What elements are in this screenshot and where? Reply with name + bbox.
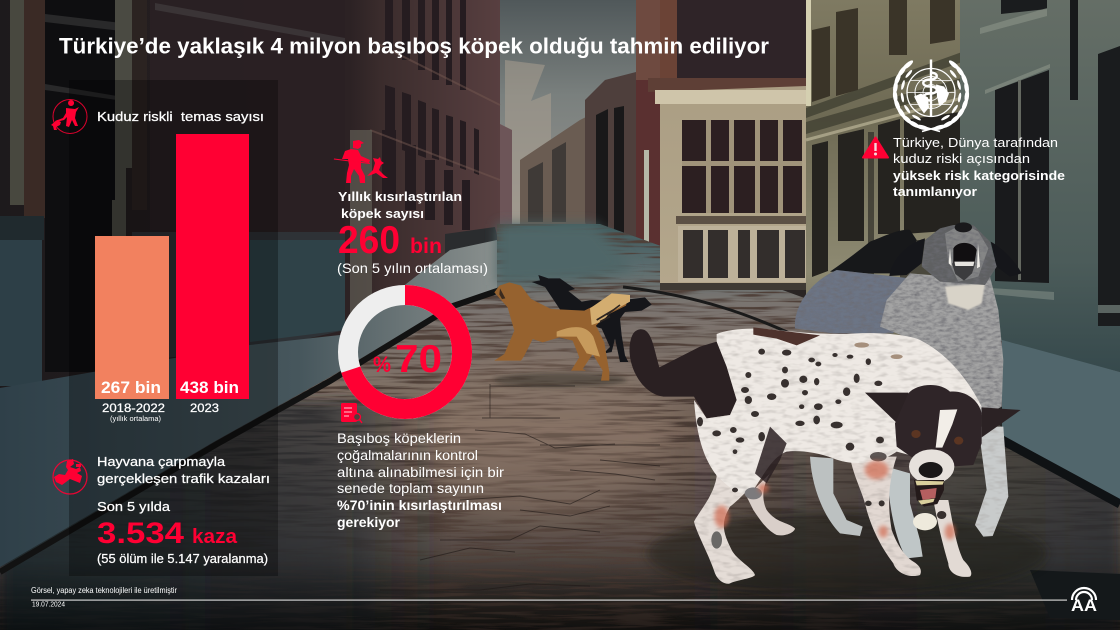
text block: Başıboş köpeklerin (337, 431, 461, 446)
manhole shadow (1030, 570, 1120, 620)
bar: 2018-2022: 2018-2022 (102, 401, 165, 415)
footer note: Görsel, yapay zeka teknolojileri ile üretilmiştir (31, 586, 177, 595)
label: Yıllık kısırlaştırılan (338, 189, 462, 204)
left brick building (0, 0, 500, 390)
panel: neutering statistics (334, 140, 488, 276)
back leg (810, 457, 863, 536)
bar: 2023: 438 bin (180, 378, 239, 397)
road surface (0, 224, 1120, 630)
rear right leg (747, 473, 795, 535)
black dog behind (830, 230, 917, 273)
icon: document with magnifier (341, 403, 362, 423)
text block: çoğalmalarının kontrol (337, 448, 478, 463)
number: neutered dogs (338, 219, 442, 262)
panel: traffic accidents (53, 454, 270, 566)
heading: Hayvana çarpmayla (97, 454, 226, 469)
title: Türkiye’de yaklaşık 4 milyon başıboş köpek olduğu tahmin ediliyor (59, 34, 769, 58)
number: accidents: kaza (192, 526, 238, 548)
icon: WHO emblem (892, 59, 970, 132)
bar chart (95, 134, 249, 423)
number: neutered dogs: 260 (338, 219, 400, 262)
icon: warning triangle (863, 138, 888, 158)
donut chart: 70 percent: % (373, 352, 391, 377)
torso (795, 270, 910, 333)
heading: Kuduz riskli temas sayısı (97, 109, 264, 124)
donut chart: 70 percent: 70 (395, 338, 442, 381)
text block: altına alınabilmesi için bir (337, 465, 505, 480)
bar: 2023 (176, 134, 249, 415)
subheading: Son 5 yılda (97, 499, 171, 514)
icon: crash in circle (53, 459, 87, 494)
text block: %70’inin kısırlaştırılması (337, 498, 502, 513)
number: accidents: 3.534 (97, 517, 184, 550)
logo: AA (1071, 588, 1097, 615)
notice text: yüksek risk kategorisinde (893, 168, 1065, 183)
tail and haunch patch (629, 329, 737, 418)
label line 2: köpek sayısı (341, 206, 424, 221)
teal right building and pavement (960, 0, 1120, 505)
road cracks (380, 384, 670, 600)
logo: AA: AA (1071, 596, 1097, 615)
front left leg (850, 457, 921, 576)
grey howling dog (795, 270, 1008, 558)
left pavement and curb (0, 224, 796, 572)
notice text (893, 135, 1065, 199)
white spotted dog (629, 327, 982, 584)
neck and chest (880, 273, 1003, 417)
ground shadow (647, 512, 1047, 595)
grey dog head (889, 222, 1022, 285)
icon: person handling dog (334, 140, 388, 183)
rear left leg (694, 427, 767, 584)
illustration: small dogs in distance (493, 275, 652, 387)
casualties note: (55 ölüm ile 5.147 yaralanma) (97, 551, 268, 566)
heading line 2: gerçekleşen trafik kazaları (97, 471, 270, 486)
number: accidents (97, 517, 238, 550)
front right leg (933, 500, 971, 577)
panel: WHO risk notice (863, 59, 1065, 199)
black dog (532, 275, 652, 362)
notice text: kuduz riski açısından (893, 151, 1030, 166)
white dog head (865, 385, 1021, 507)
number: neutered dogs: bin (410, 235, 442, 258)
panel: rabies exposure chart (51, 100, 264, 423)
mid leg (887, 467, 923, 558)
donut chart: 70 percent (348, 295, 462, 409)
text block (337, 431, 505, 530)
bar: 2018-2022 (95, 236, 169, 423)
beige right building (806, 0, 962, 340)
sky and far buildings (470, 0, 677, 272)
panel: explanation (337, 403, 505, 530)
illustration: two foreground dogs (629, 222, 1047, 595)
bar: 2023: 2023 (190, 401, 219, 415)
rice on ground (913, 513, 937, 530)
notice text: Türkiye, Dünya tarafından (893, 135, 1058, 150)
tan corner building (648, 0, 806, 290)
brown dog (494, 282, 630, 381)
note: (Son 5 yılın ortalaması) (337, 260, 488, 276)
skin lesions (714, 461, 955, 540)
bar: 2018-2022: 267 bin (101, 378, 161, 397)
coat spots (697, 342, 946, 549)
notice text: tanımlanıyor (893, 184, 977, 199)
text block: senede toplam sayının (337, 481, 484, 496)
ground shadow (493, 373, 627, 387)
reddish-brown saddle (753, 327, 820, 345)
torso (694, 329, 982, 493)
date: 19.07.2024 (32, 600, 65, 608)
text block: gerekiyor (337, 515, 401, 530)
front leg (975, 427, 1008, 537)
icon: rabies runner in circle (51, 100, 87, 134)
bar: 2018-2022: (yıllık ortalama) (110, 416, 161, 423)
dark overlay column (69, 80, 278, 576)
